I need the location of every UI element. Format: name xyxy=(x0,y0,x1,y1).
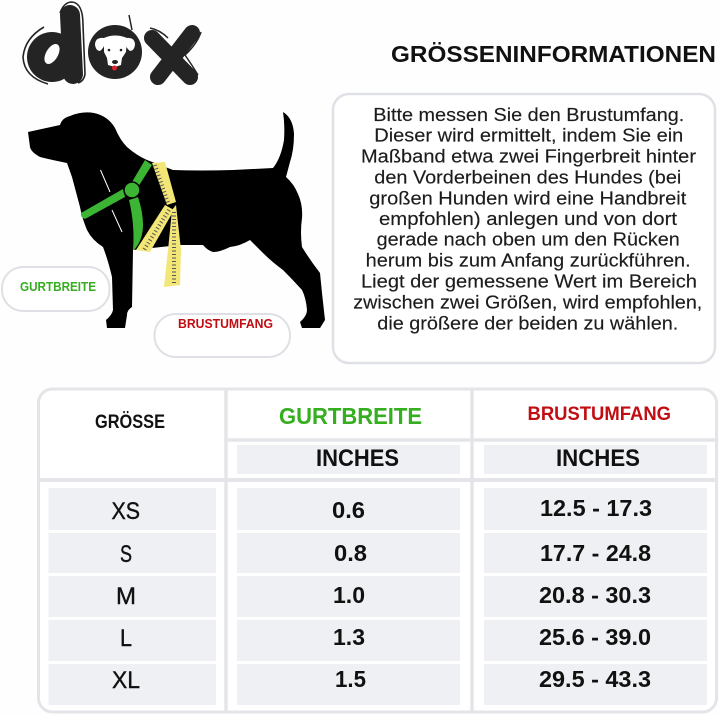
table header: BRUSTUMFANG xyxy=(528,403,671,425)
panel: measuring instructions: herum bis zum Anfang zurückführen. xyxy=(366,250,691,271)
logo letter o with dog face xyxy=(88,15,142,79)
panel: measuring instructions xyxy=(333,94,715,363)
size column xyxy=(112,498,140,694)
label: Brustumfang pill: BRUSTUMFANG xyxy=(178,317,273,331)
panel: measuring instructions: die größere der beiden zu wählen. xyxy=(377,312,678,333)
white chest lines xyxy=(100,170,122,232)
panel: measuring instructions: Bitte messen Sie den Brustumfang. xyxy=(373,104,684,125)
strap width column: 1.0 xyxy=(333,582,365,608)
size column: XS xyxy=(112,498,140,525)
size column: S xyxy=(120,541,132,568)
chest girth column: 25.6 - 39.0 xyxy=(539,624,651,650)
panel: measuring instructions: zwischen zwei Größen, wird empfohlen, xyxy=(353,291,702,312)
panel: measuring instructions: gerade nach oben um den Rücken xyxy=(377,229,680,250)
dog illustration with harness and tape xyxy=(28,112,325,328)
panel: measuring instructions: Liegt der gemessene Wert im Bereich xyxy=(361,270,697,291)
panel: measuring instructions: Dieser wird ermittelt, indem Sie ein xyxy=(374,125,683,146)
chest girth column: 29.5 - 43.3 xyxy=(539,666,651,692)
strap width column: 1.3 xyxy=(333,624,365,650)
table cell shading xyxy=(48,445,707,705)
size column: M xyxy=(116,583,136,610)
table frame xyxy=(38,389,717,712)
strap width column: 0.6 xyxy=(332,497,365,523)
chest girth column: 12.5 - 17.3 xyxy=(540,495,652,521)
size column: XL xyxy=(112,667,140,694)
table header: GRÖSSE xyxy=(95,410,165,433)
panel: measuring instructions: empfohlen) anlegen und von dort xyxy=(379,208,677,229)
table header: GURTBREITE xyxy=(279,403,422,429)
table header: INCHES xyxy=(316,445,399,472)
panel: measuring instructions: Maßband etwa zwei Fingerbreit hinter xyxy=(361,146,696,167)
label: Brustumfang pill xyxy=(154,314,290,357)
strap width column: 1.5 xyxy=(335,666,366,692)
size column: L xyxy=(120,625,132,652)
label: Gurtbreite pill: GURTBREITE xyxy=(20,280,96,294)
logo letter d xyxy=(23,2,85,84)
table header: INCHES xyxy=(556,445,640,472)
logo: dox xyxy=(23,2,201,84)
chest girth column: 17.7 - 24.8 xyxy=(540,540,651,566)
title: GRÖSSENINFORMATIONEN xyxy=(391,41,716,67)
table header xyxy=(95,403,671,472)
measuring tape xyxy=(136,162,181,287)
harness xyxy=(81,160,152,250)
panel: measuring instructions: den Vorderbeinen des Hundes (bei xyxy=(374,166,681,187)
dog silhouette xyxy=(28,112,325,328)
chest girth column xyxy=(539,495,652,692)
panel: measuring instructions: großen Hunden wird eine Handbreit xyxy=(369,187,686,208)
logo letter x xyxy=(150,28,201,82)
strap width column xyxy=(332,497,367,692)
strap width column: 0.8 xyxy=(334,540,367,566)
chest girth column: 20.8 - 30.3 xyxy=(539,582,651,608)
size table xyxy=(38,389,717,712)
label: Gurtbreite pill xyxy=(2,267,110,311)
